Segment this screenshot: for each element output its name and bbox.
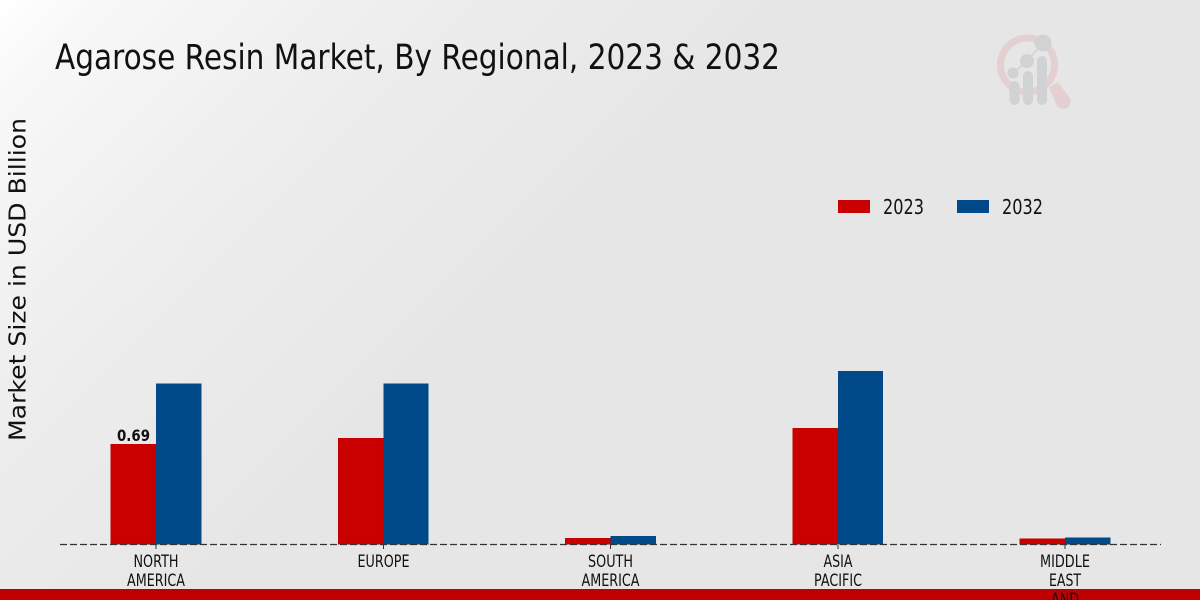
label: South America: SOUTH — [588, 552, 633, 571]
label: South America: AMERICA — [582, 571, 640, 590]
category labels — [127, 552, 1090, 600]
label: Asia Pacific: ASIA — [824, 552, 853, 571]
title: Agarose Resin Market, By Regional, 2023 & 2032 — [55, 38, 780, 78]
label: Europe: EUROPE — [358, 552, 410, 571]
legend: 2023 — [883, 195, 924, 219]
legend — [838, 195, 1043, 219]
bars: North America — [110, 384, 202, 544]
axis ticks — [156, 545, 1065, 549]
legend: 2032 — [1002, 195, 1043, 219]
bar chart — [60, 371, 1161, 549]
label: Middle East and: EAST — [1049, 571, 1082, 590]
bars: Europe — [338, 384, 428, 544]
watermark logo icon — [1000, 34, 1070, 109]
bars: Asia Pacific — [792, 371, 883, 544]
data label: 0.69 — [117, 426, 150, 445]
label: North America: NORTH — [134, 552, 178, 571]
bars: Middle East and Africa — [1020, 538, 1110, 544]
y-axis label: Market Size in USD Billion — [6, 118, 32, 441]
baseline — [60, 544, 1161, 546]
label: Middle East and: MIDDLE — [1040, 552, 1090, 571]
bars: South America — [565, 536, 656, 544]
label: Asia Pacific: PACIFIC — [814, 571, 862, 590]
label: North America: AMERICA — [127, 571, 186, 590]
bottom bar — [0, 589, 1200, 600]
